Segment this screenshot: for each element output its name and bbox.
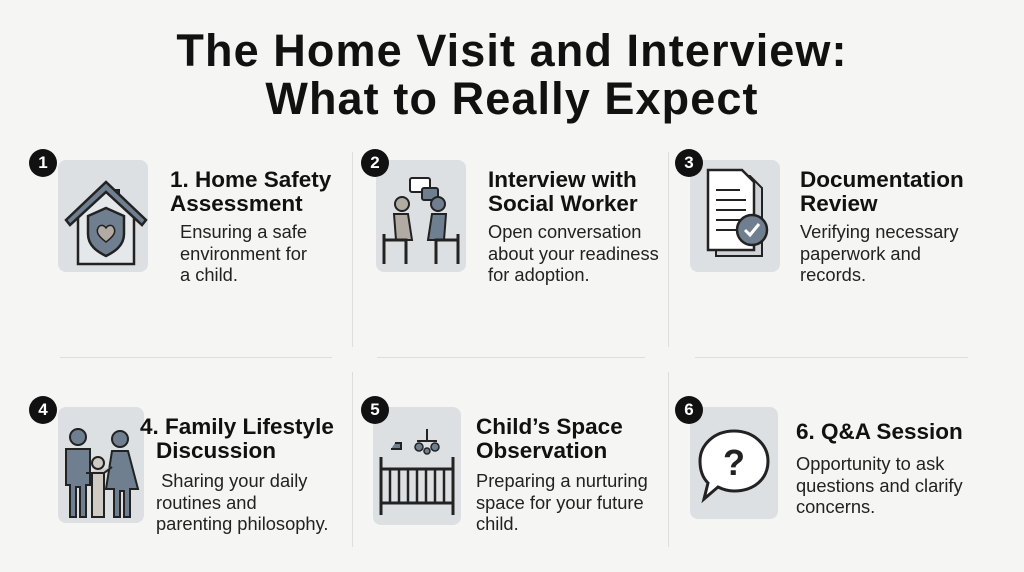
desc 4: Sharing your daily <box>161 470 307 491</box>
heading 4 <box>140 414 334 463</box>
desc 6: concerns. <box>796 496 875 517</box>
icon box: question bubble: ? <box>723 442 745 483</box>
icon box: family <box>58 407 144 523</box>
icon box: documents <box>690 160 780 272</box>
badge 3 <box>675 149 703 177</box>
desc 3 <box>800 221 959 285</box>
desc 2: Open conversation <box>488 221 641 242</box>
title <box>176 25 848 124</box>
desc 5 <box>476 470 648 534</box>
heading 2: Social Worker <box>488 191 638 216</box>
badge 2: 2 <box>370 153 380 172</box>
heading 3: Documentation <box>800 167 964 192</box>
badge 5 <box>361 396 389 424</box>
panel 5: child's space <box>361 396 648 534</box>
desc 2 <box>488 221 659 285</box>
badge 6: 6 <box>684 400 694 419</box>
desc 2: about your readiness <box>488 242 659 264</box>
icon box: people talking <box>376 160 466 272</box>
heading 1: 1. Home Safety <box>170 167 331 192</box>
heading 5: Observation <box>476 438 607 463</box>
heading 3 <box>800 167 964 216</box>
desc 4: routines and <box>156 492 257 512</box>
badge 4: 4 <box>38 400 48 419</box>
heading 2 <box>488 167 638 216</box>
desc 4 <box>156 470 328 534</box>
badge 2 <box>361 149 389 177</box>
title: What to Really Expect <box>265 73 759 124</box>
heading 4: Discussion <box>156 438 276 463</box>
desc 3: paperwork and <box>800 242 921 264</box>
panel 6: Q&A <box>675 396 963 519</box>
badge 1 <box>29 149 57 177</box>
desc 1: Ensuring a safe <box>180 221 307 242</box>
panel 2: interview <box>361 149 659 285</box>
heading 5: Child’s Space <box>476 414 623 439</box>
panel 3: documentation <box>675 149 964 285</box>
badge 4 <box>29 396 57 424</box>
desc 5: space for your future <box>476 492 644 512</box>
heading 3: Review <box>800 191 878 216</box>
heading 2: Interview with <box>488 167 637 192</box>
heading 1 <box>170 167 332 216</box>
desc 6: questions and clarify <box>796 474 963 496</box>
desc 4: parenting philosophy. <box>156 513 328 534</box>
heading 1: Assessment <box>170 191 303 216</box>
heading 5 <box>476 414 623 463</box>
desc 3: Verifying necessary <box>800 221 959 242</box>
desc 6: Opportunity to ask <box>796 453 944 474</box>
panel 1: home safety <box>29 149 332 285</box>
desc 2: for adoption. <box>488 264 590 285</box>
desc 1: a child. <box>180 264 238 285</box>
heading 4: 4. Family Lifestyle <box>140 414 334 439</box>
icon box: crib <box>373 407 461 525</box>
desc 5: Preparing a nurturing <box>476 470 648 491</box>
icon box: house <box>58 160 148 272</box>
badge 1: 1 <box>38 153 48 172</box>
desc 1: environment for <box>180 242 307 264</box>
icon box: question bubble <box>690 407 778 519</box>
badge 5: 5 <box>370 400 380 419</box>
badge 6 <box>675 396 703 424</box>
desc 5: child. <box>476 513 519 534</box>
desc 1 <box>180 221 307 285</box>
desc 6 <box>796 453 963 517</box>
heading 6: 6. Q&A Session <box>796 419 963 444</box>
panel 4: family lifestyle <box>29 396 334 534</box>
desc 3: records. <box>800 264 866 285</box>
title: The Home Visit and Interview: <box>176 25 848 76</box>
badge 3: 3 <box>684 153 694 172</box>
